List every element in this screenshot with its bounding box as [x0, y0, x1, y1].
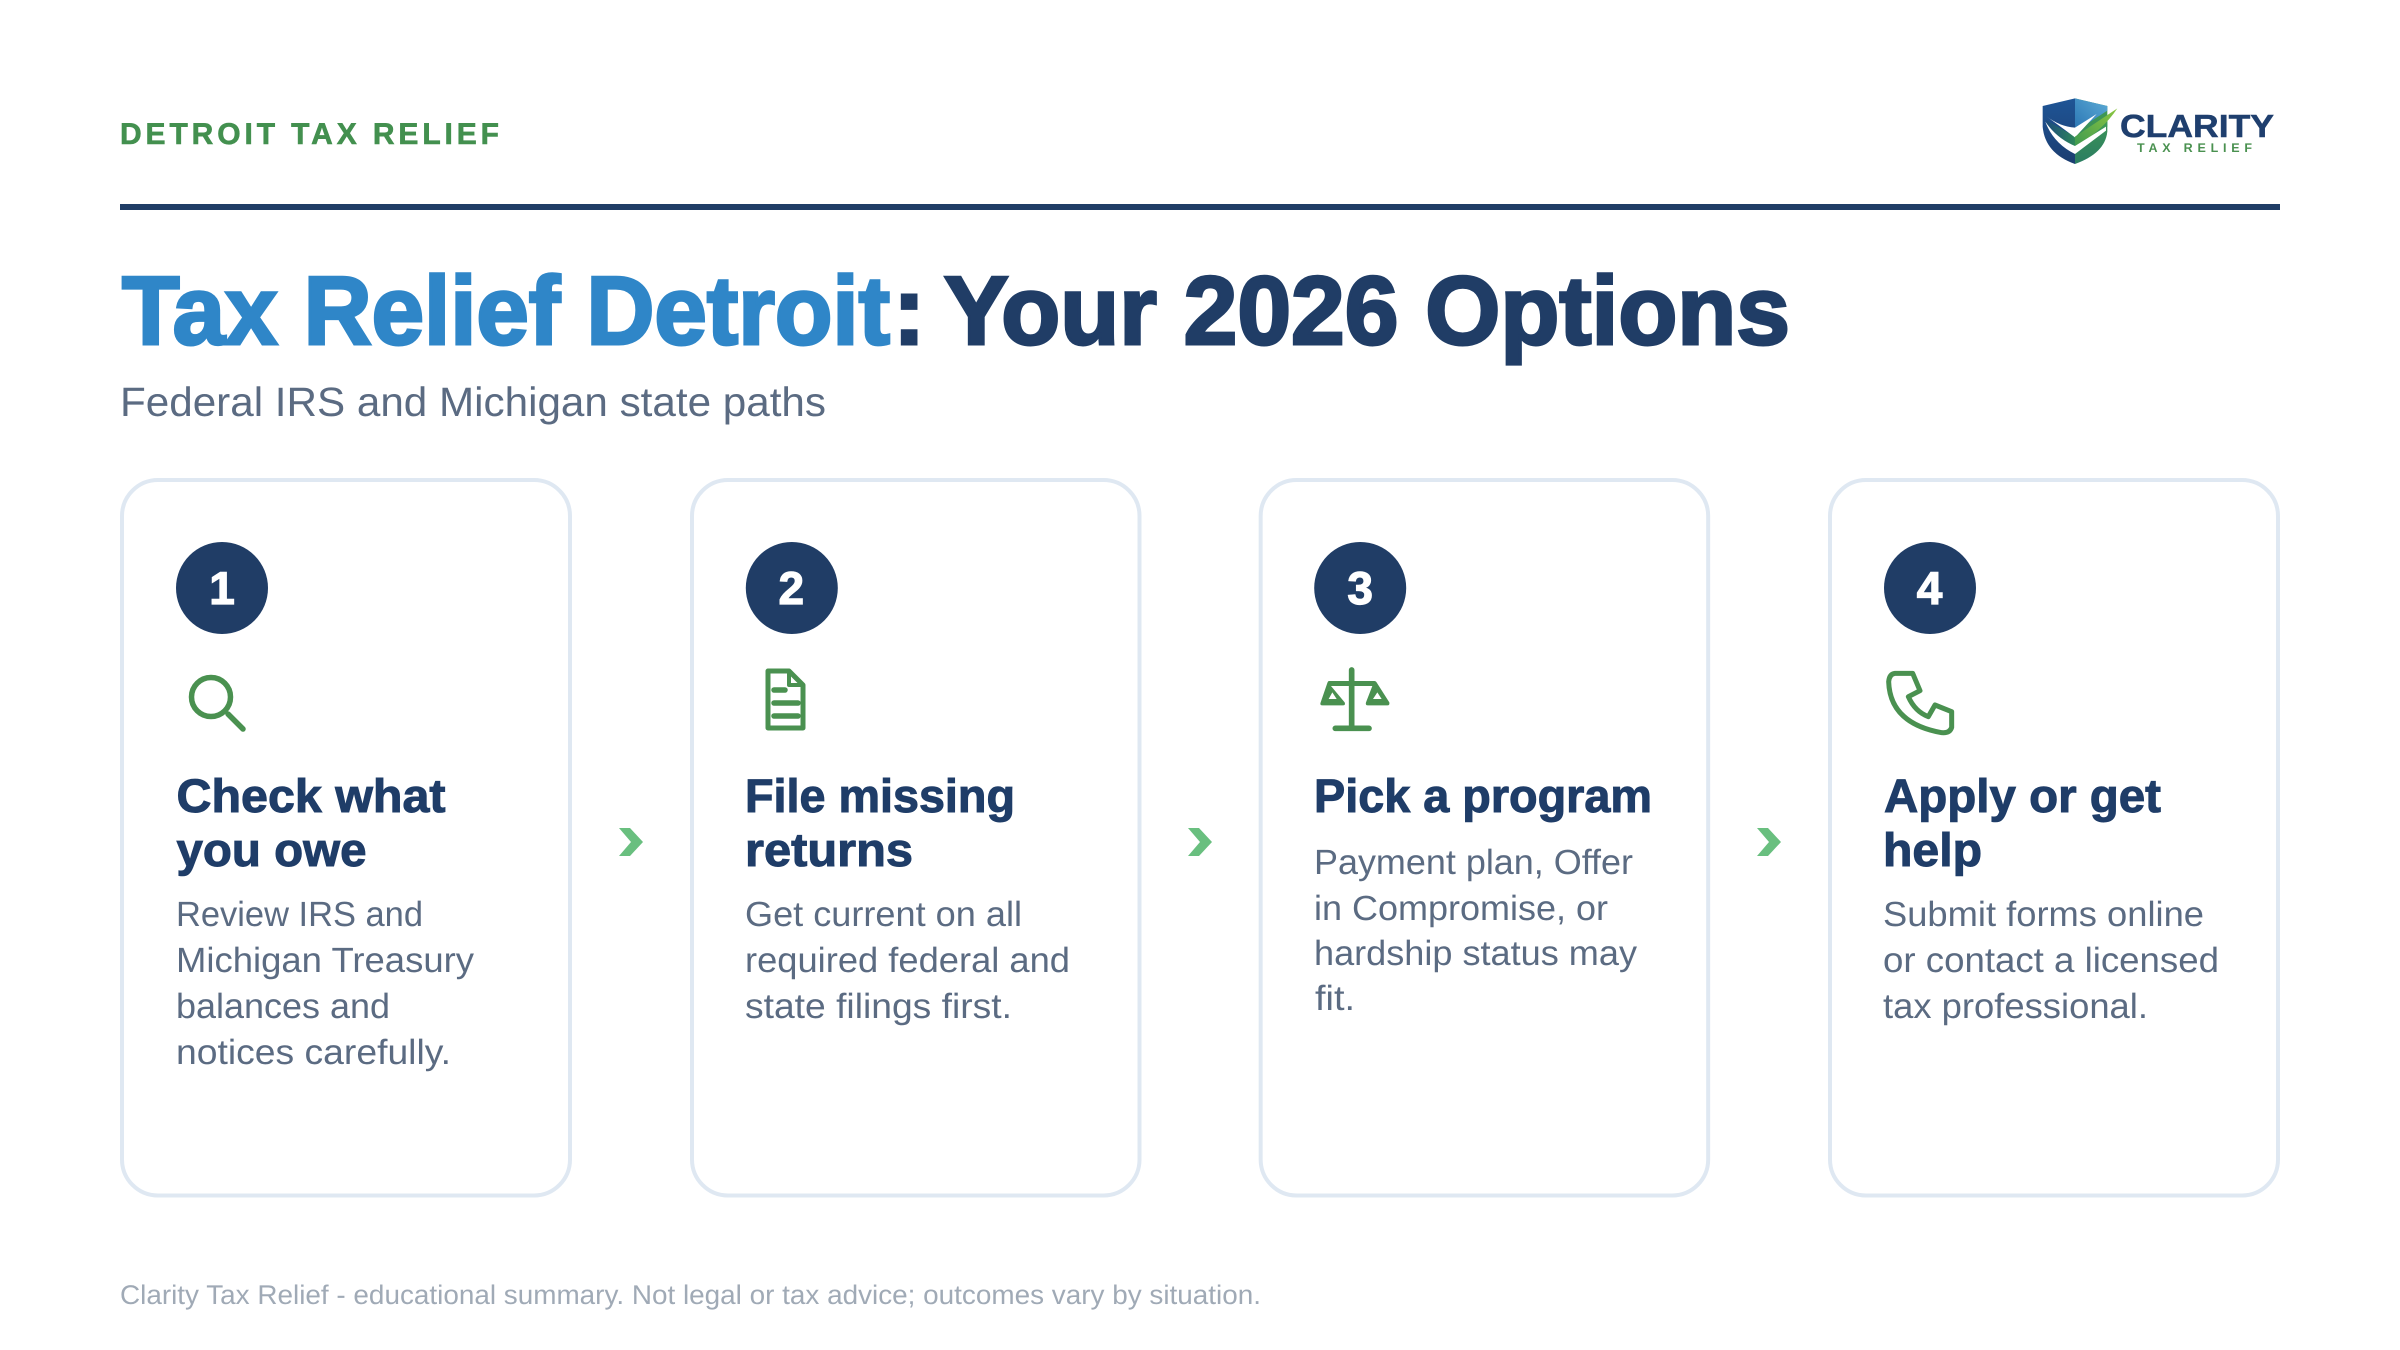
icon: telephone [1889, 673, 1952, 733]
body text: Payment plan, Offer [1314, 843, 1633, 882]
step number 2: 2 [779, 562, 804, 614]
step number 4 [1884, 542, 1976, 634]
heading: check what you owe: you owe [176, 823, 366, 876]
panel: step 4 [1830, 480, 2278, 1196]
arrow 3 to 4 [1757, 828, 1781, 856]
body text [176, 895, 475, 1072]
heading: apply or get help [1883, 769, 2161, 876]
body text: balances and [176, 987, 390, 1026]
body text: notices carefully. [176, 1033, 451, 1072]
body text: state filings first. [745, 987, 1012, 1026]
body text: Get current on all [745, 895, 1022, 934]
subtitle: Federal IRS and Michigan state paths [120, 379, 826, 425]
body text: or contact a licensed [1883, 941, 2219, 980]
icon: magnifying glass [192, 678, 243, 729]
heading: file missing returns: returns [745, 823, 913, 876]
body text: Submit forms online [1883, 895, 2204, 934]
body text: hardship status may [1314, 934, 1638, 973]
heading: check what you owe [176, 769, 446, 876]
heading: apply or get help: help [1883, 823, 1982, 876]
body text: tax professional. [1883, 987, 2148, 1026]
heading: file missing returns: File missing [745, 769, 1015, 822]
panel: step 1 [122, 480, 570, 1196]
arrow 1 to 2 [619, 828, 643, 856]
heading: apply or get help: Apply or get [1884, 769, 2161, 822]
step number 3 [1314, 542, 1406, 634]
title: Your 2026 Options [944, 256, 1790, 365]
body text [1314, 843, 1638, 1018]
logo wordmark: CLARITY [2120, 108, 2274, 144]
heading: check what you owe: Check what [176, 769, 446, 822]
step number 1 [176, 542, 268, 634]
eyebrow label: DETROIT TAX RELIEF [120, 118, 499, 151]
body text: in Compromise, or [1314, 889, 1608, 928]
step number 4: 4 [1917, 562, 1943, 614]
icon: balance scales [1320, 670, 1389, 728]
heading: file missing returns [745, 769, 1015, 876]
body text: Review IRS and [176, 895, 423, 934]
body text: Michigan Treasury [176, 941, 475, 980]
step number 1: 1 [209, 562, 235, 614]
title: Tax Relief Detroit [122, 256, 890, 365]
heading: pick a program: Pick a program [1314, 769, 1652, 822]
step number 3: 3 [1347, 562, 1373, 614]
logo tagline: TAX RELIEF [2137, 141, 2252, 155]
body text: fit. [1315, 979, 1355, 1018]
icon: shield with check [2043, 98, 2117, 164]
arrow 2 to 3 [1188, 828, 1212, 856]
panel: step 3 [1261, 480, 1708, 1196]
logo: Clarity Tax Relief [2043, 98, 2274, 164]
body text: required federal and [745, 941, 1070, 980]
icon: document [768, 671, 803, 728]
body text [745, 895, 1070, 1026]
title [122, 256, 1790, 365]
step number 2 [746, 542, 838, 634]
body text [1883, 895, 2219, 1026]
footer disclaimer: Clarity Tax Relief - educational summary. Not legal or tax advice; outcomes vary by situation. [120, 1280, 1261, 1310]
title: : [893, 256, 925, 365]
panel: step 2 [692, 480, 1140, 1196]
